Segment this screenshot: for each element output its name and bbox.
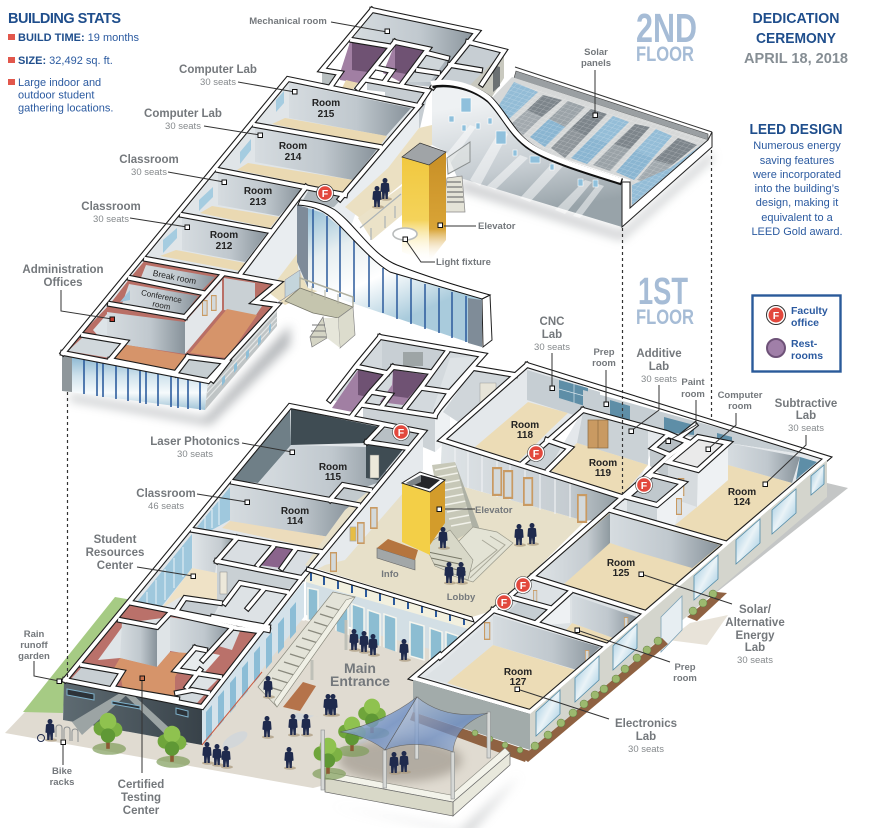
callouts first floor: racks — [50, 777, 74, 788]
heading: building stats: BUILD TIME: 19 months — [18, 32, 140, 44]
legend — [752, 296, 840, 372]
callouts first floor: Lab — [649, 361, 669, 373]
entrance canopy wall band — [306, 567, 474, 622]
exterior stair to second floor — [258, 592, 355, 711]
callouts second floor: Light fixture — [436, 257, 491, 268]
callouts first floor: 30 seats — [534, 342, 570, 353]
room number labels: 213 — [250, 197, 267, 208]
curved roof band over rear block — [432, 84, 622, 182]
faculty offices near room 124 — [627, 475, 683, 525]
second floor walls — [63, 10, 504, 381]
trees — [92, 699, 389, 780]
terrace platform — [325, 738, 510, 816]
callouts second floor: Administration — [22, 264, 104, 276]
floor label: 1st floor: FLOOR — [636, 306, 694, 329]
heading: building stats: SIZE: 32,492 sq. ft. — [18, 55, 113, 67]
callouts second floor: panels — [581, 58, 611, 69]
text block: LEED design: LEED Gold award. — [751, 226, 843, 238]
callouts second floor: 30 seats — [131, 167, 167, 178]
room number labels: 215 — [318, 109, 335, 120]
callouts first floor: Computer — [718, 390, 763, 401]
leader lines and markers — [34, 22, 806, 773]
callouts first floor — [18, 316, 837, 817]
callouts second floor: Classroom — [119, 154, 179, 166]
callouts first floor: 30 seats — [737, 655, 773, 666]
first floor back block — [330, 337, 515, 452]
callouts first floor: Solar/ — [739, 604, 772, 616]
second floor front glass facade — [62, 353, 208, 410]
text block: LEED design: were incorporated — [752, 169, 841, 181]
callouts first floor: Center — [97, 560, 134, 572]
room number labels: Room — [279, 141, 307, 152]
west wing base — [65, 406, 423, 707]
faculty office markers first floor: F — [641, 480, 648, 492]
second floor south wall shadow — [460, 152, 712, 240]
certified testing center — [65, 603, 268, 707]
room number labels: 212 — [216, 241, 233, 252]
floor label: 1st floor — [636, 271, 694, 329]
bike racks — [38, 725, 78, 742]
conference room — [110, 278, 203, 317]
faculty office area upper — [300, 188, 345, 207]
info desk — [377, 539, 418, 570]
text block: LEED design: design, making it — [756, 197, 838, 209]
first floor stair — [425, 462, 513, 582]
second floor exterior stair landing — [277, 270, 355, 348]
legend: Faculty — [791, 305, 828, 317]
callouts first floor: Alternative — [725, 617, 785, 629]
callouts first floor: room — [681, 389, 705, 400]
text block: LEED design: saving features — [760, 155, 835, 167]
callouts second floor: Computer Lab — [179, 64, 257, 76]
callouts first floor: room — [673, 673, 697, 684]
callouts first floor: garden — [18, 651, 50, 662]
legend: Rest- — [791, 338, 818, 350]
room number labels: 115 — [325, 472, 342, 483]
administration offices — [63, 275, 278, 381]
callouts first floor: Energy — [736, 630, 775, 642]
callouts first floor: 30 seats — [641, 374, 677, 385]
callouts first floor: Additive — [636, 348, 682, 360]
people plaza and lobby — [45, 523, 539, 775]
callouts first floor: 30 seats — [628, 744, 664, 755]
shade canopy — [321, 697, 490, 799]
room number labels: 119 — [595, 468, 612, 479]
room number labels: Room — [244, 186, 272, 197]
solar panels — [497, 82, 708, 205]
room number labels: 124 — [734, 497, 751, 508]
light fixture — [393, 228, 417, 240]
room number labels: Room — [210, 230, 238, 241]
room 127 electronics lab — [413, 610, 605, 712]
second floor wing shadow — [70, 325, 290, 425]
faculty office marker second floor: F — [322, 188, 329, 200]
callouts first floor: Bike — [52, 766, 72, 777]
callouts first floor: Rain — [24, 629, 44, 640]
callouts first floor: Lab — [636, 731, 656, 743]
legend: rooms — [791, 350, 823, 362]
room number labels: Room — [312, 98, 340, 109]
callouts second floor: 30 seats — [93, 214, 129, 225]
floor label: 2nd floor: FLOOR — [636, 43, 694, 66]
callouts first floor: Lobby — [447, 592, 476, 603]
callouts first floor: Paint — [681, 377, 705, 388]
second floor stairs behind elevator — [443, 142, 470, 212]
icon: faculty office: F — [773, 310, 780, 322]
room number labels: 114 — [287, 516, 304, 527]
text block: LEED design — [750, 122, 843, 238]
front wall of room 127 — [413, 680, 530, 750]
second floor east siding — [205, 305, 277, 410]
callouts first floor: 30 seats — [788, 423, 824, 434]
additive lab and prep — [583, 390, 827, 458]
callouts first floor: Entrance — [330, 673, 390, 689]
heading: building stats: outdoor student — [18, 90, 94, 102]
room 119 — [548, 410, 667, 497]
callouts first floor: Elevator — [475, 505, 513, 516]
room number labels: Room — [504, 667, 532, 678]
legend: office — [791, 317, 819, 329]
plaza ground — [5, 483, 848, 828]
callouts second floor: Classroom — [81, 201, 141, 213]
heading: building stats: gathering locations. — [18, 102, 113, 114]
room 118 CNC lab — [442, 365, 600, 470]
floor label: 2nd floor: 2ND — [636, 5, 697, 51]
break room — [130, 259, 220, 293]
heading: dedication ceremony — [744, 11, 848, 67]
callouts first floor: Electronics — [615, 718, 677, 730]
south wall of second floor under curved roof — [432, 85, 622, 227]
computer room block — [650, 435, 728, 507]
callouts first floor: Subtractive — [775, 398, 837, 410]
room number labels: 214 — [285, 152, 302, 163]
floor label: 1st floor: 1ST — [638, 271, 688, 313]
text block: LEED design: LEED DESIGN — [750, 122, 842, 138]
room number labels: Room — [281, 506, 309, 517]
room number labels: Conference — [140, 288, 183, 305]
room number labels: Break room — [152, 268, 197, 286]
room 115 laser photonics — [233, 409, 420, 505]
heading: building stats: Large indoor and — [18, 77, 101, 89]
room number labels: 125 — [613, 568, 630, 579]
text block: LEED design: into the building’s — [755, 183, 840, 195]
callouts first floor: Resources — [86, 547, 144, 559]
heading: dedication ceremony: DEDICATION — [752, 11, 840, 27]
callouts second floor: Elevator — [478, 221, 516, 232]
lobby floor — [305, 470, 585, 617]
corridor wall facing lobby — [303, 432, 423, 577]
callouts first floor: Prep — [674, 662, 696, 673]
callouts first floor: Prep — [593, 347, 615, 358]
room number labels: Room — [511, 420, 539, 431]
callouts first floor: Info — [381, 569, 399, 580]
heading: dedication ceremony: APRIL 18, 2018 — [744, 51, 848, 67]
faculty office markers first floor — [392, 424, 652, 610]
room 125 solar alternative energy lab — [532, 510, 725, 612]
callouts first floor: Lab — [796, 410, 816, 422]
ground in front of entrance — [262, 620, 420, 720]
callouts first floor: Lab — [542, 329, 562, 341]
callouts first floor: Lab — [745, 642, 765, 654]
room 215 — [255, 79, 419, 147]
callouts second floor: Offices — [44, 277, 82, 289]
room number labels: 127 — [510, 677, 527, 688]
curved glass facade — [297, 200, 492, 347]
callouts first floor: Center — [123, 805, 160, 817]
room number labels — [140, 98, 756, 688]
student resources center — [137, 532, 322, 627]
room number labels: Room — [589, 458, 617, 469]
callouts first floor: 30 seats — [177, 449, 213, 460]
callouts first floor: room — [592, 358, 616, 369]
callouts first floor: 46 seats — [148, 501, 184, 512]
callouts first floor: Student — [94, 534, 137, 546]
callouts first floor: room — [728, 401, 752, 412]
room 213 — [182, 170, 305, 230]
first floor walls — [65, 337, 827, 712]
room number labels: Room — [319, 462, 347, 473]
skylight light beams — [432, 125, 604, 218]
callouts second floor: Mechanical room — [249, 16, 327, 27]
callouts second floor: 30 seats — [165, 121, 201, 132]
heading: dedication ceremony: CEREMONY — [756, 31, 836, 47]
first floor restrooms — [332, 370, 428, 413]
faculty office markers first floor: F — [501, 597, 508, 609]
corrugated wall of rooms 118 and 119 — [440, 440, 622, 523]
elevator first floor — [402, 472, 445, 555]
floor connection dashed lines — [68, 150, 712, 678]
callouts first floor: runoff — [20, 640, 49, 651]
callouts second floor: 30 seats — [200, 77, 236, 88]
elevator second floor — [402, 143, 446, 262]
text block: LEED design: Numerous energy — [753, 140, 841, 152]
callouts first floor: Certified — [118, 779, 164, 791]
room 124 subtractive lab — [610, 443, 827, 543]
callouts first floor: Classroom — [136, 488, 196, 500]
main entrance frontage — [306, 570, 472, 666]
faculty office markers first floor: F — [398, 427, 405, 439]
south wall small windows — [449, 98, 598, 187]
heading: building stats: BUILDING STATS — [8, 11, 121, 27]
people second floor corridor — [372, 178, 392, 209]
planter beds and shrubs — [410, 590, 727, 762]
second floor restrooms — [322, 42, 428, 90]
icon: restrooms — [767, 339, 785, 357]
room 212 — [146, 215, 270, 273]
room number labels: room — [152, 299, 172, 312]
faculty office marker second floor — [316, 184, 334, 202]
solar panel roof — [490, 67, 712, 227]
room 214 — [218, 125, 380, 195]
callouts first floor: Testing — [121, 792, 161, 804]
callouts second floor: Computer Lab — [144, 108, 222, 120]
prep room and faculty offices — [493, 577, 643, 645]
text block: LEED design: equivalent to a — [761, 212, 834, 224]
callouts first floor: CNC — [540, 316, 564, 328]
second floor wing base — [63, 79, 432, 381]
east exterior wall — [530, 460, 827, 750]
callouts second floor — [22, 16, 611, 289]
floor label: 2nd floor — [636, 5, 697, 66]
room number labels: Room — [728, 487, 756, 498]
faculty office markers first floor: F — [533, 448, 540, 460]
heading: building stats — [8, 11, 140, 114]
room number labels: 118 — [517, 430, 534, 441]
second floor rear block — [322, 10, 504, 128]
room number labels: Room — [607, 558, 635, 569]
faculty office markers first floor: F — [520, 580, 527, 592]
callouts first floor: Laser Photonics — [150, 436, 240, 448]
mechanical room — [352, 10, 477, 87]
first floor front wall under testing center — [63, 681, 202, 745]
callouts first floor: Main — [344, 660, 376, 676]
corridor wall and floor — [243, 108, 419, 296]
callouts second floor: Solar — [584, 47, 608, 58]
room 114 classroom — [197, 485, 353, 550]
first floor east glazing of west wing — [202, 582, 304, 745]
